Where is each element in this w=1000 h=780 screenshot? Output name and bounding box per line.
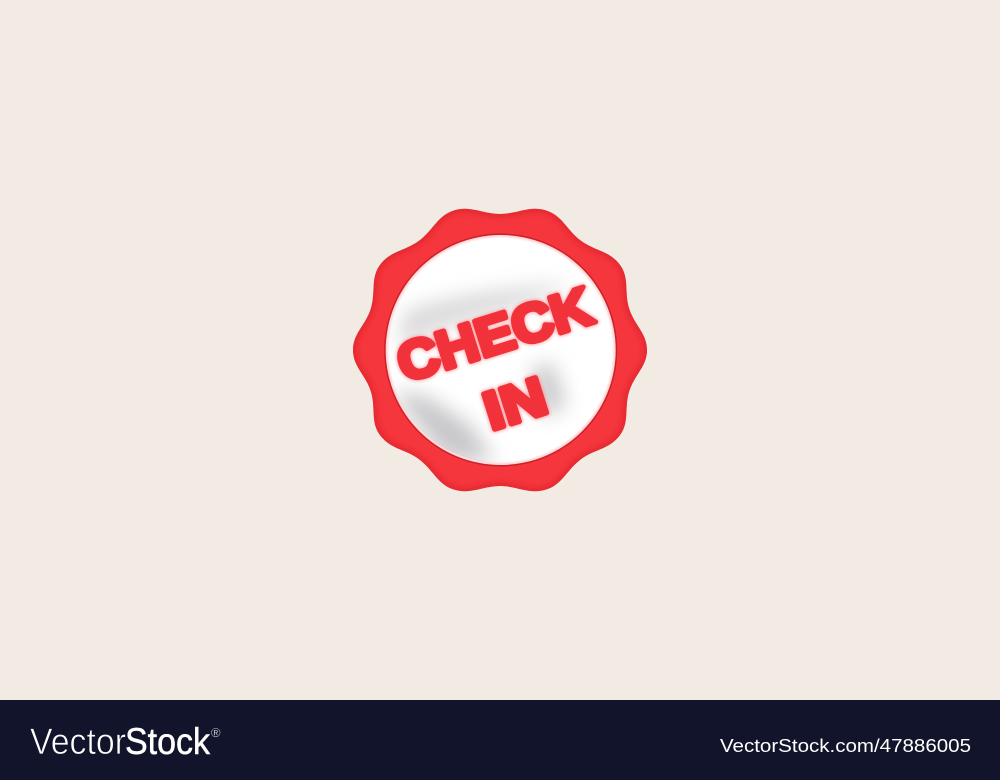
heading: IN: IN (477, 366, 554, 442)
illustration canvas (0, 208, 1000, 780)
logo: VectorStock: Stock (125, 721, 210, 762)
disc shading (392, 284, 572, 462)
logo: VectorStock: Vector (30, 721, 126, 762)
text glow: IN: IN (477, 366, 554, 442)
scalloped red rim (353, 209, 647, 491)
footer bar (0, 700, 1000, 780)
white disc (386, 235, 616, 465)
disc red edge glow (386, 236, 615, 464)
logo: VectorStock: ® (211, 725, 221, 740)
heading: CHECK: CHECK (390, 276, 600, 394)
image id: VectorStock.com/47886005 (720, 735, 971, 756)
logo: VectorStock (30, 721, 221, 762)
rim inner shadow ring (384, 234, 617, 466)
text glow: CHECK: CHECK (390, 276, 600, 394)
badge (353, 209, 647, 491)
